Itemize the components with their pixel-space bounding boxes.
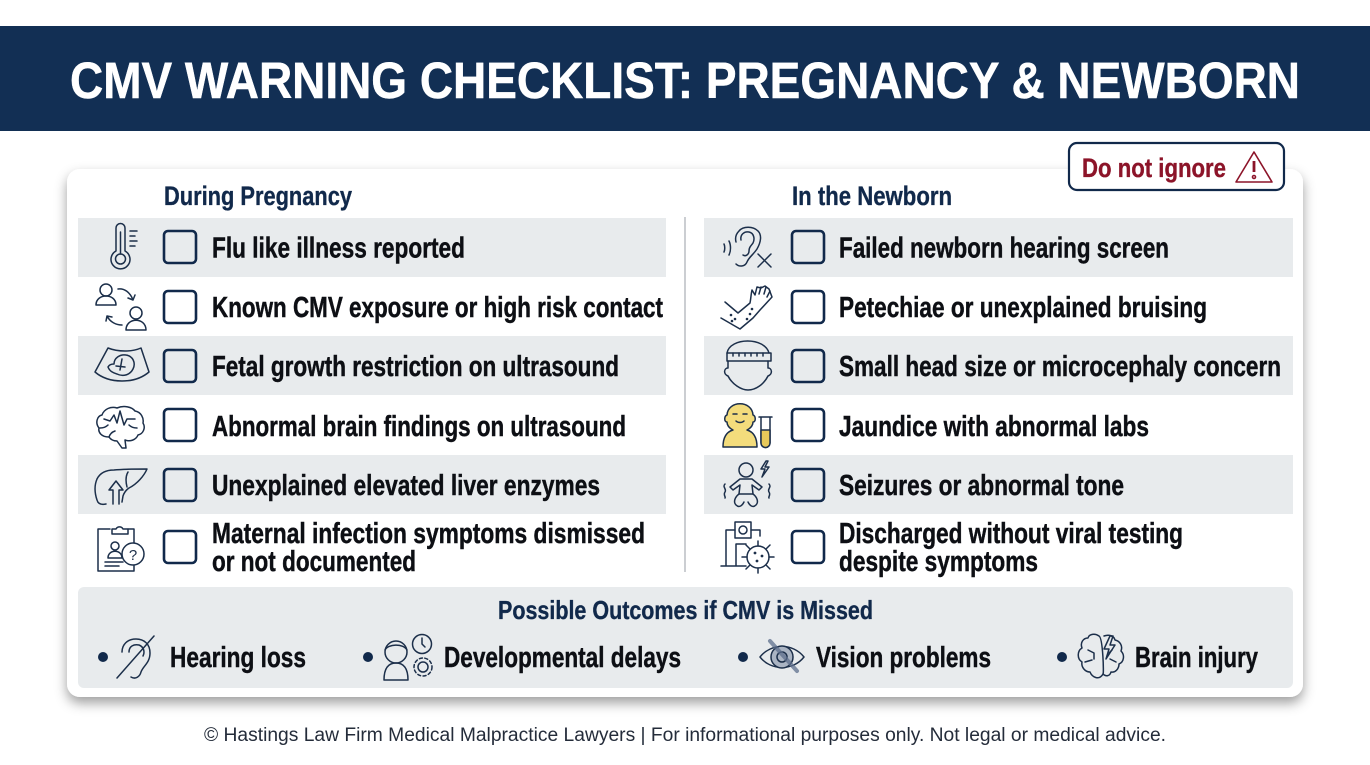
item continuation: despite symptoms	[839, 546, 1038, 578]
heading: during pregnancy: During Pregnancy	[164, 181, 352, 211]
heading: possible outcomes: Possible Outcomes if CMV is Missed	[498, 595, 873, 625]
outcome: vision problems: Vision problems	[816, 642, 991, 674]
icon: seizing baby	[724, 461, 770, 506]
icon: clipboard question: ?	[129, 547, 137, 564]
item: Seizures or abnormal tone	[839, 470, 1124, 502]
checkbox	[164, 409, 196, 441]
column divider	[684, 217, 686, 572]
outcome: brain injury	[1057, 634, 1258, 678]
icon: clipboard question	[98, 527, 144, 571]
icon: ultrasound	[95, 348, 149, 381]
item: Failed newborn hearing screen	[839, 232, 1169, 264]
row bands	[78, 218, 1293, 514]
checkbox	[164, 469, 196, 501]
icon: arm with bruising	[721, 286, 772, 329]
item: Known CMV exposure or high risk contact	[212, 292, 663, 324]
icon: ear with x	[724, 227, 771, 267]
checkbox	[792, 231, 824, 263]
heading: in the newborn: In the Newborn	[792, 181, 952, 211]
icon: head measurement	[725, 341, 771, 390]
outcome: hearing loss	[98, 636, 306, 678]
icon: brain with pulse	[97, 407, 144, 448]
checkbox	[164, 531, 196, 563]
icon: hospital and virus	[721, 522, 774, 573]
item: Unexplained elevated liver enzymes	[212, 470, 600, 502]
item: Discharged without viral testing	[839, 518, 1183, 550]
item: Abnormal brain findings on ultrasound	[212, 411, 626, 443]
icon: liver	[95, 469, 147, 504]
checkbox	[164, 291, 196, 323]
callout: do not ignore	[1069, 143, 1284, 190]
checkbox	[792, 469, 824, 501]
checkbox	[792, 291, 824, 323]
icon: jaundiced baby with test tube	[723, 404, 772, 448]
outcome: developmental delays: Developmental delays	[444, 642, 681, 674]
item: Jaundice with abnormal labs	[839, 411, 1149, 443]
icon: warning triangle	[1236, 152, 1272, 182]
checkbox	[792, 531, 824, 563]
title banner	[0, 26, 1370, 131]
panel: newborn items	[721, 227, 1281, 578]
outcome: vision problems	[738, 641, 991, 674]
panel: possible outcomes	[78, 587, 1293, 688]
checkbox	[164, 350, 196, 382]
outcome: developmental delays	[363, 634, 681, 680]
item: Maternal infection symptoms dismissed	[212, 518, 645, 550]
panel: checklist card	[67, 169, 1303, 697]
item: Petechiae or unexplained bruising	[839, 292, 1207, 324]
icon: thermometer	[111, 224, 137, 269]
checkbox	[164, 231, 196, 263]
callout: do not ignore: Do not ignore	[1082, 153, 1226, 183]
item continuation: or not documented	[212, 546, 416, 578]
footer disclaimer: © Hastings Law Firm Medical Malpractice Lawyers | For informational purposes only. Not legal or medical advice.	[204, 725, 1166, 746]
icon: exposure contact	[96, 284, 146, 330]
checkbox	[792, 350, 824, 382]
panel: during pregnancy items	[95, 224, 663, 578]
outcome: brain injury: Brain injury	[1135, 642, 1258, 674]
item: Fetal growth restriction on ultrasound	[212, 351, 619, 383]
checkbox	[792, 409, 824, 441]
outcome: hearing loss: Hearing loss	[170, 642, 306, 674]
item: Flu like illness reported	[212, 232, 465, 264]
